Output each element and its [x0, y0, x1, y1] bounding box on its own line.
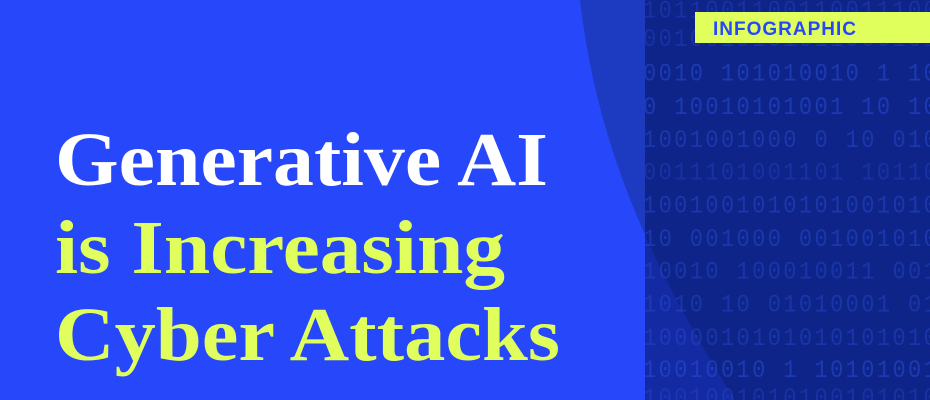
- title: Cyber Attacks: [55, 293, 560, 377]
- dark binary panel: [643, 0, 930, 400]
- label: INFOGRAPHIC tag: INFOGRAPHIC: [713, 19, 857, 40]
- title: Generative AI: [55, 118, 548, 202]
- label: INFOGRAPHIC tag: [695, 12, 930, 43]
- title: [55, 118, 560, 377]
- title: is Increasing: [55, 206, 505, 290]
- curved band: [580, 0, 930, 400]
